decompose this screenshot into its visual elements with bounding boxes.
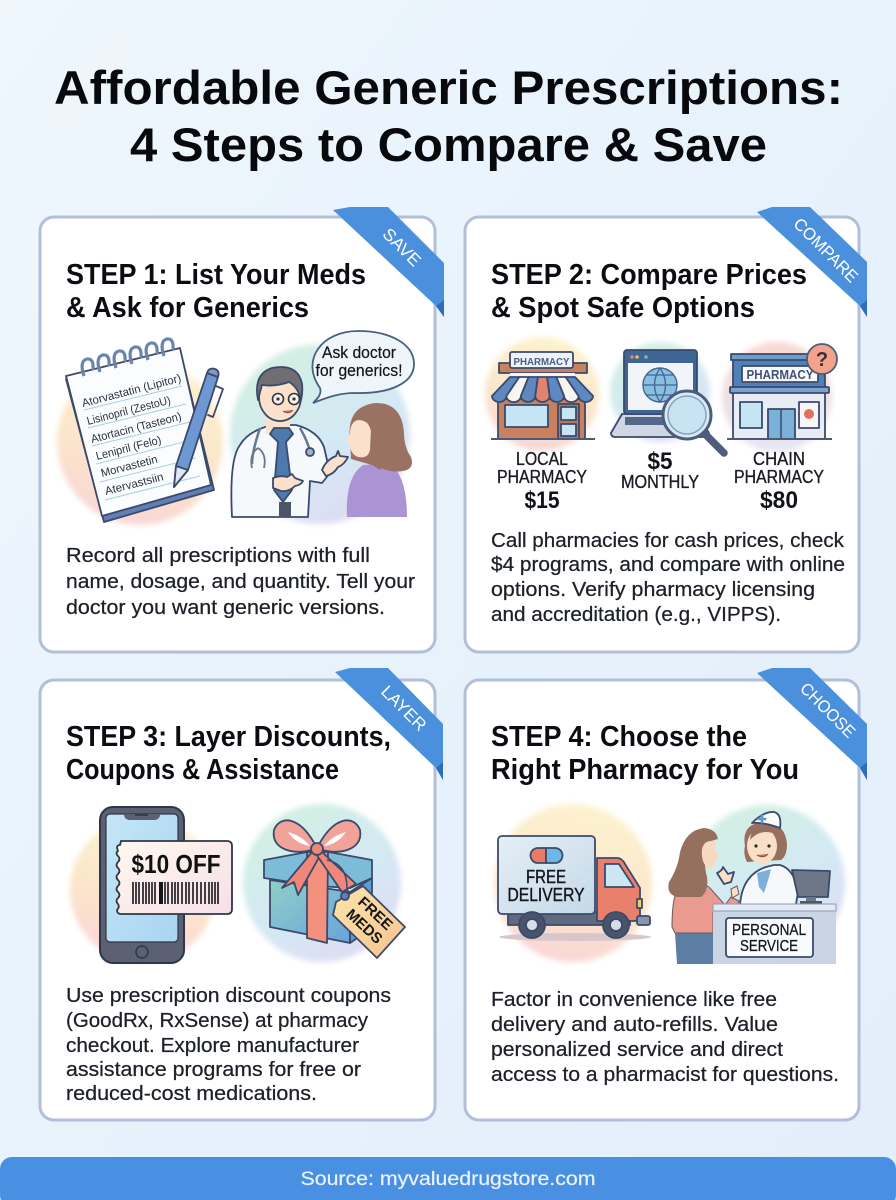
body text: Use prescription discount coupons (66, 984, 391, 1007)
body text: Record all prescriptions with full (66, 544, 370, 567)
heading: & Spot Safe Options (491, 292, 755, 324)
ribbon: save: SAVE (379, 224, 425, 270)
ribbon: choose (757, 668, 867, 780)
heading: STEP 1: List Your Meds (66, 259, 366, 291)
label: chain pharmacy price (734, 449, 824, 514)
icon: phone with coupon: $10 OFF (132, 849, 220, 879)
icon: pharmacist helping customer: SERVICE (740, 938, 798, 955)
body text: Call pharmacies for cash prices, check (491, 529, 845, 552)
panel: step 3 (40, 668, 443, 1120)
ribbon: choose: CHOOSE (796, 679, 859, 742)
body text: checkout. Explore manufacturer (66, 1034, 359, 1057)
heading (491, 259, 807, 324)
panel: step 1 (40, 207, 444, 652)
label: online price (621, 448, 699, 492)
icon: pharmacist helping customer (668, 805, 845, 964)
heading (66, 721, 391, 786)
body text: (GoodRx, RxSense) at pharmacy (66, 1009, 369, 1032)
icon: chain pharmacy (722, 342, 837, 452)
icon: chain pharmacy: ? (816, 349, 828, 371)
heading: STEP 4: Choose the (491, 721, 747, 753)
body text: $4 programs, and compare with online (491, 553, 845, 576)
icon: notebook with medication list: Lisinopril (ZestoU) (86, 395, 172, 428)
title: 4 Steps to Compare & Save (130, 118, 767, 171)
body text: delivery and auto-refills. Value (491, 1013, 778, 1036)
ribbon: compare: COMPARE (790, 214, 862, 286)
label: local pharmacy price (497, 449, 587, 514)
footer: source bar (0, 1157, 896, 1200)
body text (491, 988, 839, 1086)
body text: reduced-cost medications. (66, 1082, 317, 1105)
heading: & Ask for Generics (66, 292, 309, 324)
heading: Right Pharmacy for You (491, 754, 799, 786)
icon: notebook with medication list: Atortacin (Tasteon) (90, 411, 183, 446)
icon: gift box with free meds tag (243, 804, 405, 962)
body text: personalized service and direct (491, 1038, 783, 1061)
icon: free delivery truck (494, 804, 652, 962)
icon: pharmacist helping customer: PERSONAL (732, 922, 806, 939)
panel: step 2 (465, 207, 867, 652)
panel: step 4 (465, 668, 867, 1120)
speech bubble: for generics! (316, 362, 402, 380)
icon: notebook with medication list: Atorvastatin (Lipitor) (81, 373, 183, 410)
body text: doctor you want generic versions. (66, 596, 385, 619)
label: online price: $5 (648, 448, 672, 475)
label: online price: MONTHLY (621, 472, 699, 492)
icon: phone with coupon (70, 807, 232, 963)
heading: STEP 3: Layer Discounts, (66, 721, 391, 753)
ribbon: save (333, 207, 444, 317)
label: chain pharmacy price: $80 (760, 487, 798, 514)
label: local pharmacy price: PHARMACY (497, 467, 587, 487)
icon: free delivery truck: FREE (526, 867, 566, 887)
label: local pharmacy price: LOCAL (516, 449, 568, 469)
icon: notebook with medication list (57, 339, 223, 525)
body text: and accreditation (e.g., VIPPS). (491, 603, 781, 626)
speech bubble (312, 331, 414, 403)
label: chain pharmacy price: CHAIN (753, 449, 805, 469)
icon: notebook with medication list: Atervastsiin (104, 471, 165, 498)
icon: laptop and magnifier (610, 342, 724, 453)
icon: pharmacist helping customer: ✚ (757, 814, 767, 826)
label: chain pharmacy price: PHARMACY (734, 467, 824, 487)
body text (66, 984, 391, 1105)
ribbon: layer: LAYER (377, 682, 430, 735)
heading: STEP 2: Compare Prices (491, 259, 807, 291)
label: local pharmacy price: $15 (524, 487, 560, 514)
body text: Factor in convenience like free (491, 988, 777, 1011)
icon: local pharmacy (485, 337, 599, 451)
body text: options. Verify pharmacy licensing (491, 578, 815, 601)
heading (491, 721, 799, 786)
icon: gift box with free meds tag: FREE (354, 894, 396, 934)
heading: Coupons & Assistance (66, 754, 339, 786)
body text: assistance programs for free or (66, 1058, 361, 1081)
ribbon: layer (335, 668, 443, 780)
body text: access to a pharmacist for questions. (491, 1063, 839, 1086)
icon: chain pharmacy: PHARMACY (746, 367, 814, 382)
speech bubble: Ask doctor (322, 344, 396, 362)
body text: name, dosage, and quantity. Tell your (66, 570, 415, 593)
ribbon: compare (757, 207, 867, 317)
icon: doctor talking to patient (230, 344, 412, 524)
icon: notebook with medication list: Morvastetin (100, 454, 159, 480)
icon: local pharmacy: PHARMACY (514, 356, 570, 368)
icon: gift box with free meds tag: MEDS (343, 906, 386, 948)
body text (491, 529, 845, 626)
icon: free delivery truck: DELIVERY (508, 885, 584, 905)
icon: notebook with medication list: Lenipril (Felo) (95, 434, 163, 463)
heading (66, 259, 366, 324)
title (54, 61, 843, 171)
body text (66, 544, 415, 619)
footer: source bar: Source: myvaluedrugstore.com (300, 1169, 596, 1190)
title: Affordable Generic Prescriptions: (54, 61, 843, 114)
